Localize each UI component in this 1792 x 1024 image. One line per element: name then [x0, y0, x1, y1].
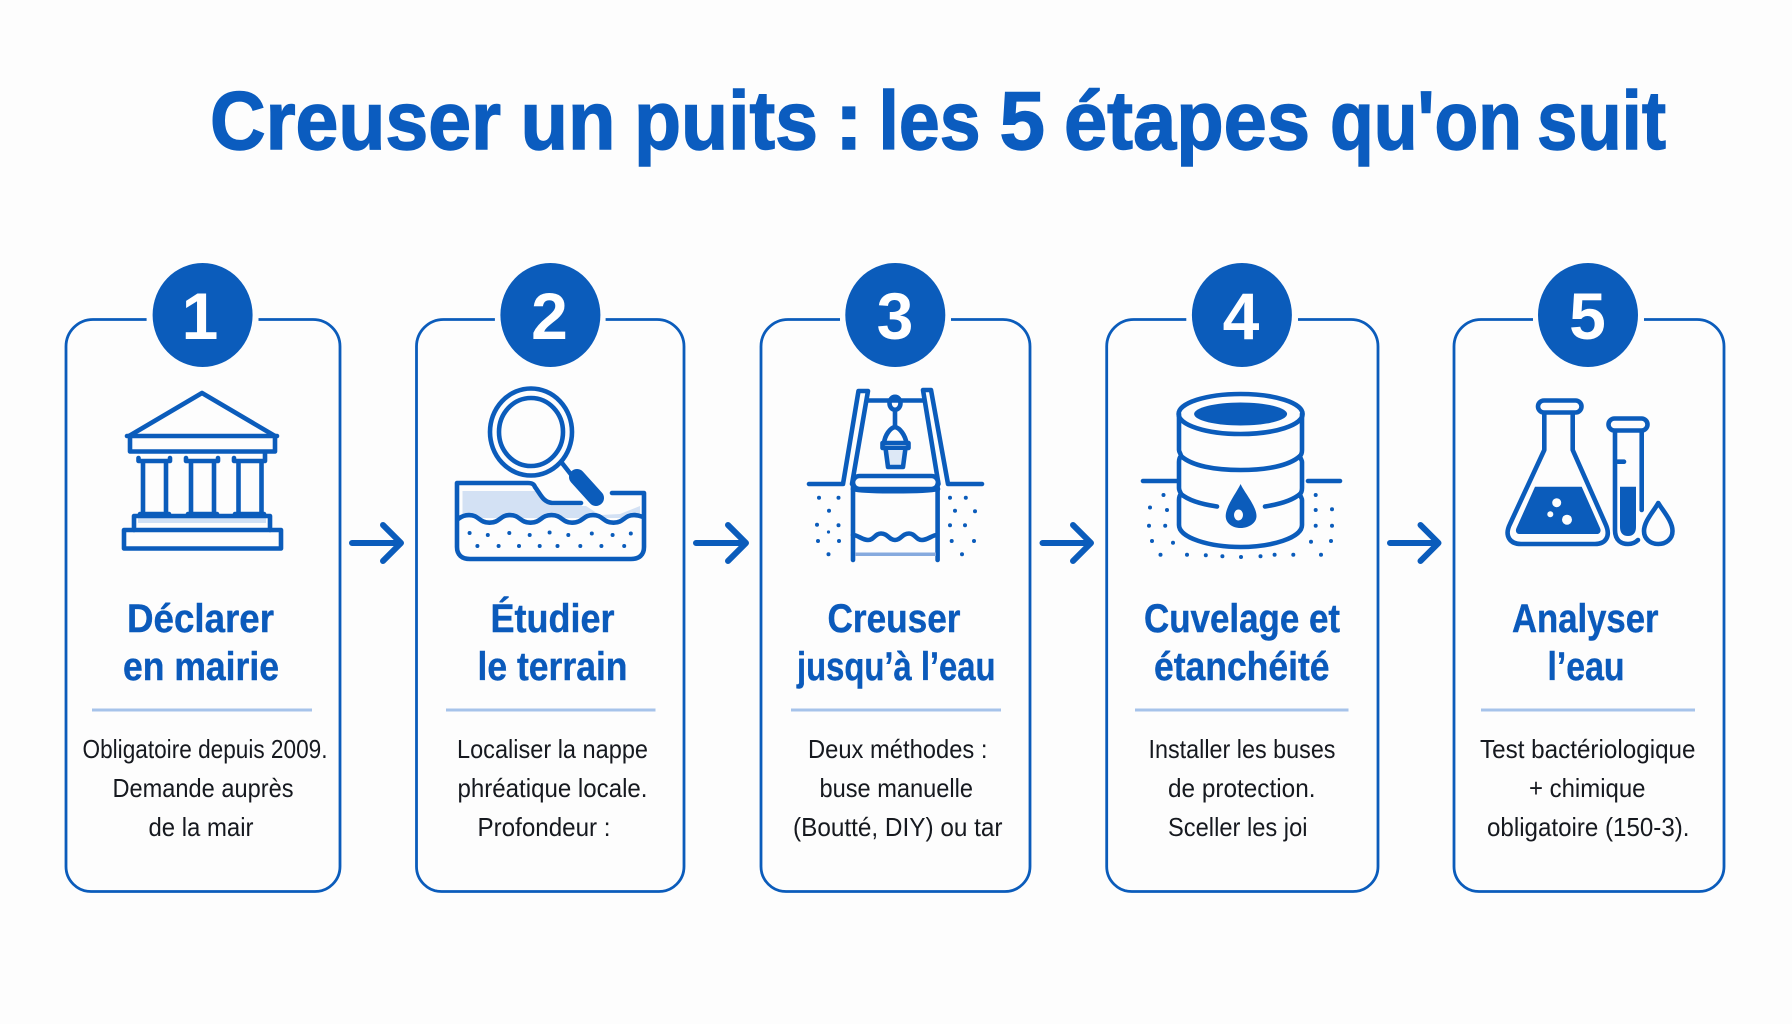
description: de la mair — [148, 812, 254, 842]
heading: le terrain — [478, 645, 628, 689]
number badge 2: 2 — [531, 279, 568, 353]
arrow 1 to 2 — [352, 525, 401, 561]
description — [457, 734, 648, 842]
number badge 3: 3 — [877, 279, 913, 353]
number badge 1: 1 — [182, 279, 218, 353]
number badge 2 — [500, 263, 600, 367]
heading — [1144, 597, 1340, 689]
description: + chimique — [1529, 773, 1646, 803]
number badge 3 — [845, 263, 945, 367]
heading: Creuser — [828, 597, 960, 641]
icon: hand-dug well with bucket — [809, 390, 982, 560]
card outline — [1454, 320, 1724, 892]
heading: étanchéité — [1154, 645, 1330, 689]
heading: jusqu’à l’eau — [796, 645, 996, 689]
title: étapes — [1064, 74, 1310, 167]
arrow 4 to 5 — [1390, 525, 1438, 561]
heading — [1512, 597, 1658, 689]
title: un — [520, 74, 616, 167]
arrow 2 to 3 — [696, 525, 746, 561]
card outline — [66, 320, 340, 892]
icon: town hall — [124, 393, 281, 548]
description: Deux méthodes : — [808, 734, 988, 764]
heading: Étudier — [490, 596, 614, 641]
icon: magnifier over terrain — [457, 388, 644, 559]
title: qu'on — [1330, 74, 1522, 167]
description: phréatique locale. — [458, 773, 648, 803]
title: 5 — [1000, 74, 1045, 167]
description: Installer les buses — [1148, 734, 1336, 764]
description: Obligatoire depuis 2009. — [82, 734, 328, 764]
description: obligatoire (150-3). — [1487, 812, 1690, 842]
icon: lab flask, test tube and drop — [1508, 400, 1672, 544]
description: buse manuelle — [820, 773, 973, 803]
number badge 5: 5 — [1569, 279, 1606, 353]
heading — [478, 596, 628, 689]
panel: step 2 — [416, 263, 684, 892]
panel: step 1 — [66, 263, 340, 892]
title: puits — [634, 74, 818, 167]
arrow 3 to 4 — [1042, 525, 1091, 561]
description: (Boutté, DIY) ou tar — [793, 812, 1003, 842]
number badge 4: 4 — [1223, 279, 1260, 353]
heading: en mairie — [123, 645, 279, 689]
heading — [123, 597, 279, 689]
heading: Analyser — [1512, 597, 1658, 641]
description: Profondeur : — [478, 812, 610, 842]
title — [210, 74, 1666, 167]
panel: step 5 — [1454, 263, 1724, 892]
heading: Cuvelage et — [1144, 597, 1340, 641]
number badge 4 — [1192, 263, 1292, 367]
number badge 5 — [1538, 263, 1638, 367]
title: : — [835, 74, 863, 167]
card outline — [416, 320, 684, 892]
panel: step 4 — [1107, 263, 1378, 892]
description — [793, 734, 1003, 842]
title: suit — [1537, 74, 1666, 167]
title: les — [878, 74, 980, 167]
description — [1148, 734, 1336, 842]
panel: step 3 — [761, 263, 1030, 892]
heading — [796, 597, 996, 689]
heading: Déclarer — [127, 597, 274, 641]
title: Creuser — [210, 74, 501, 167]
description: Demande auprès — [112, 773, 294, 803]
card outline — [761, 320, 1030, 892]
description: Test bactériologique — [1480, 734, 1696, 764]
description — [1480, 734, 1696, 842]
description — [82, 734, 328, 842]
description: Sceller les joi — [1168, 812, 1308, 842]
card outline — [1107, 320, 1378, 892]
description: de protection. — [1168, 773, 1316, 803]
number badge 1 — [153, 263, 253, 367]
heading: l’eau — [1548, 645, 1624, 689]
description: Localiser la nappe — [457, 734, 648, 764]
icon: well casing rings with drop — [1143, 394, 1340, 559]
